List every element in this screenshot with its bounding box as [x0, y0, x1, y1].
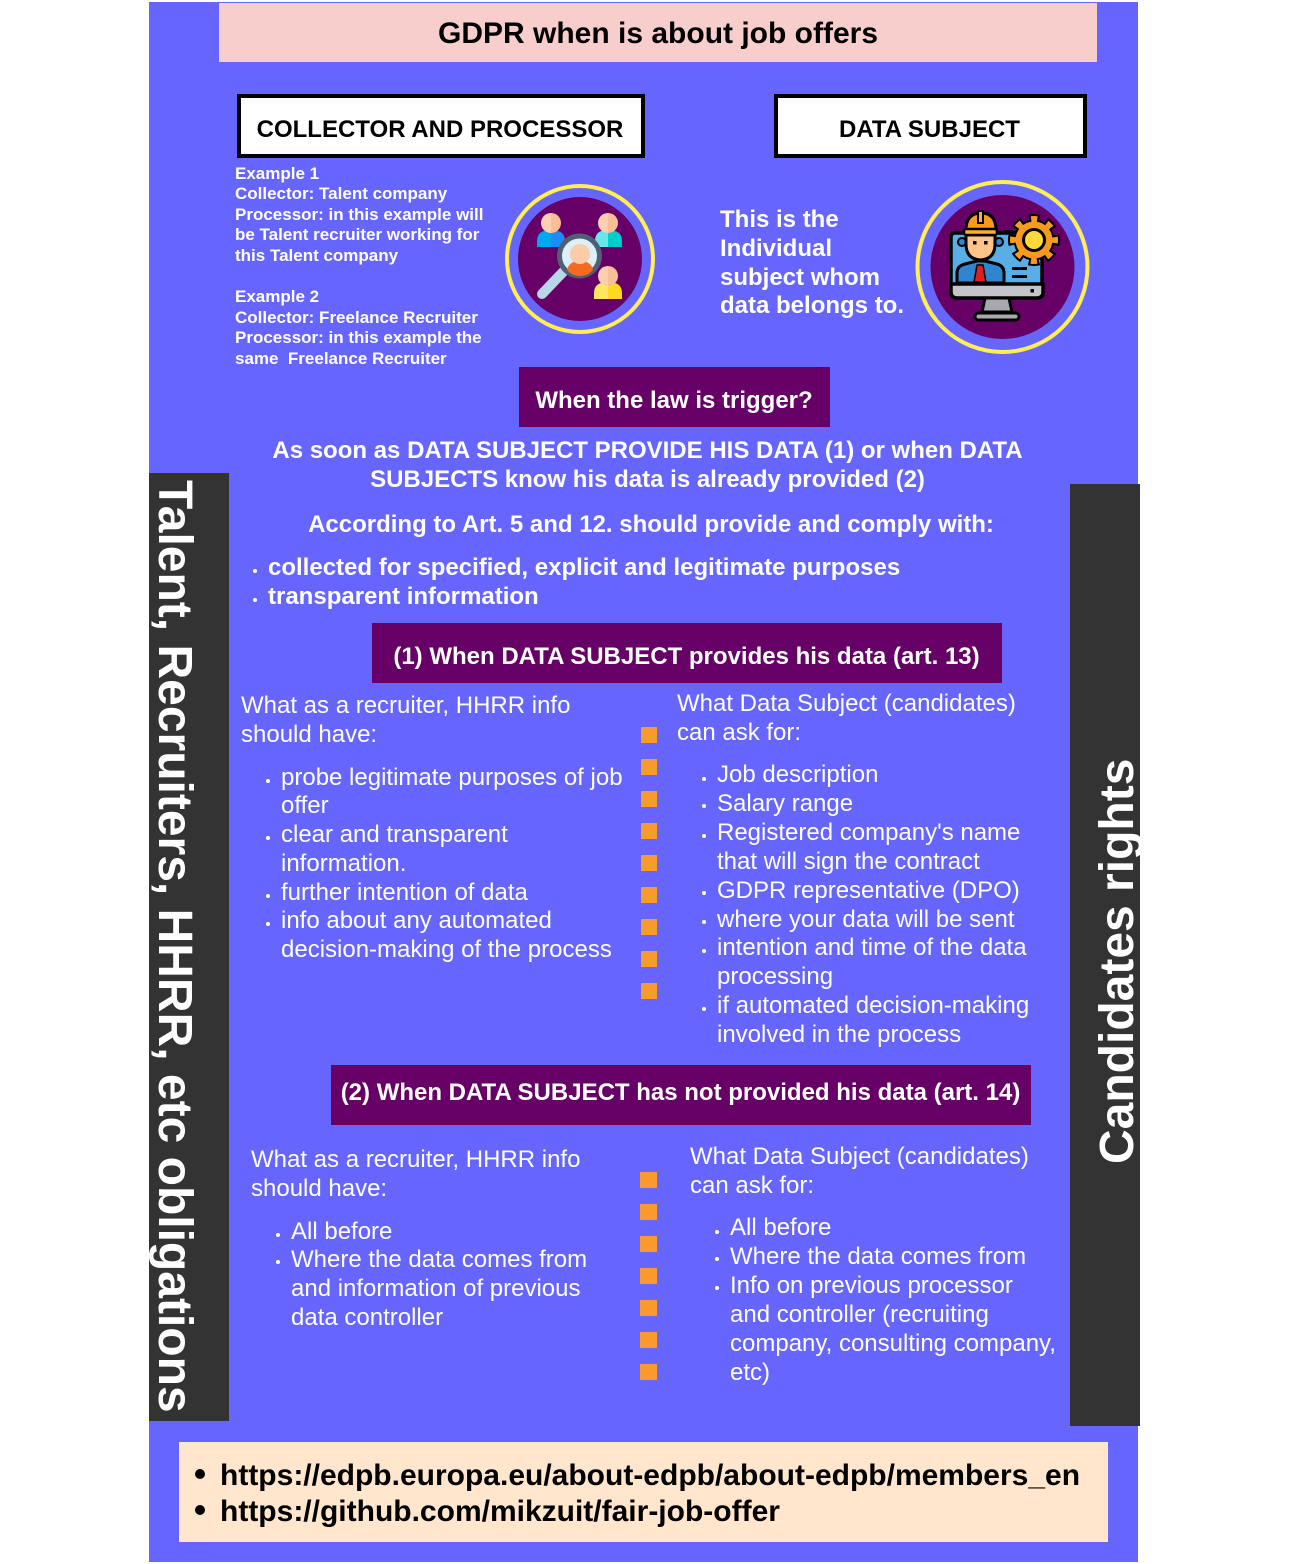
text block: recruiter info section 1: offer — [281, 792, 329, 819]
text block: candidate rights section 1: processing — [717, 963, 833, 990]
text block: candidate rights section 1: Registered company's name — [717, 819, 1020, 846]
list: principles: transparent information — [268, 583, 539, 610]
sidebar: recruiter obligations: Talent, Recruiters, HHRR, etc obligations — [148, 480, 201, 1413]
heading: when the law is trigger — [519, 367, 830, 427]
text block: recruiter info section 2: Where the data comes from — [291, 1246, 587, 1273]
text block: candidate rights section 2: All before — [730, 1214, 831, 1241]
text block: data subject definition: Individual — [720, 235, 832, 262]
title: GDPR when is about job offers — [438, 17, 878, 50]
text block: trigger explanation: As soon as DATA SUBJECT PROVIDE HIS DATA (1) or when DATA — [272, 437, 1023, 464]
heading: section 2: (2) When DATA SUBJECT has not provided his data (art. 14) — [341, 1079, 1020, 1106]
text block: candidate rights section 2: company, consulting company, — [730, 1330, 1056, 1357]
divider squares section 2 — [640, 1172, 657, 1380]
text block: recruiter info section 2: What as a recruiter, HHRR info — [251, 1146, 580, 1173]
icon: recruiter search — [505, 184, 655, 334]
text block: candidate rights section 1: where your data will be sent — [717, 906, 1014, 933]
title — [219, 3, 1097, 62]
text block: data subject definition: This is the — [720, 206, 839, 233]
text block: candidate rights section 2: and controller (recruiting — [730, 1301, 989, 1328]
text block: collector examples: this Talent company — [235, 246, 398, 265]
text block: recruiter info section 2: and information of previous — [291, 1275, 580, 1302]
text block: candidate rights section 1: Job description — [717, 761, 878, 788]
heading: collector and processor: COLLECTOR AND PROCESSOR — [257, 116, 623, 143]
text block: recruiter info section 1: decision-making of the process — [281, 936, 612, 963]
list: principles — [253, 554, 900, 610]
text block: candidate rights section 2: What Data Subject (candidates) — [690, 1143, 1029, 1170]
text block: candidate rights section 2: Where the data comes from — [730, 1243, 1026, 1270]
text block: candidate rights section 1: GDPR representative (DPO) — [717, 877, 1020, 904]
panel: reference links: https://github.com/mikzuit/fair-job-offer — [220, 1495, 780, 1528]
text block: collector examples: be Talent recruiter working for — [235, 225, 479, 244]
text block: recruiter info section 1 — [241, 692, 623, 963]
text block: collector examples: Processor: in this example the — [235, 328, 482, 347]
text block: recruiter info section 1: information. — [281, 850, 406, 877]
text block: recruiter info section 2: All before — [291, 1218, 392, 1244]
heading: section 2 — [331, 1065, 1031, 1125]
text block: trigger explanation — [272, 437, 1023, 493]
heading: data subject — [774, 94, 1087, 158]
text block: data subject definition: subject whom — [720, 264, 880, 291]
text block: candidate rights section 1: What Data Subject (candidates) — [677, 690, 1016, 717]
heading: when the law is trigger: When the law is trigger? — [535, 387, 813, 414]
icon: data subject computer — [916, 180, 1090, 354]
text block: collector examples: Example 1 — [235, 164, 319, 182]
text block: collector examples — [235, 164, 483, 368]
text block: candidate rights section 1 — [677, 690, 1029, 1048]
text block: recruiter info section 2: should have: — [251, 1175, 387, 1202]
sidebar: recruiter obligations — [149, 473, 229, 1421]
text block: candidate rights section 1: that will sign the contract — [717, 848, 980, 875]
heading: section 1 — [372, 623, 1002, 683]
text block: candidate rights section 1: involved in the process — [717, 1021, 961, 1048]
text block: candidate rights section 2 — [690, 1143, 1056, 1386]
text block: article 5 and 12: According to Art. 5 and 12. should provide and comply with: — [308, 511, 994, 538]
text block: recruiter info section 2: data controller — [291, 1304, 443, 1331]
heading: section 1: (1) When DATA SUBJECT provides his data (art. 13) — [393, 643, 980, 670]
panel: reference links: https://edpb.europa.eu/about-edpb/about-edpb/members_en — [220, 1459, 1080, 1492]
text block: candidate rights section 1: intention and time of the data — [717, 934, 1027, 961]
text block: collector examples: same Freelance Recruiter — [235, 349, 447, 368]
text block: candidate rights section 2: can ask for: — [690, 1172, 814, 1199]
text block: candidate rights section 1: if automated decision-making — [717, 992, 1029, 1019]
text block: recruiter info section 2 — [251, 1146, 587, 1331]
text block: data subject definition: data belongs to. — [720, 292, 904, 319]
sidebar: candidates rights: Candidates rights — [1091, 759, 1144, 1164]
page background panel — [149, 2, 1138, 1562]
text block: recruiter info section 1: What as a recruiter, HHRR info — [241, 692, 570, 719]
text block: collector examples: Collector: Freelance Recruiter — [235, 308, 478, 327]
heading: data subject: DATA SUBJECT — [839, 116, 1020, 143]
sidebar: candidates rights — [1070, 484, 1140, 1426]
text block: collector examples: Collector: Talent company — [235, 184, 447, 203]
text block: candidate rights section 1: Salary range — [717, 790, 853, 817]
text block: recruiter info section 1: further intention of data — [281, 879, 528, 906]
text block: candidate rights section 2: etc) — [730, 1359, 770, 1386]
text block: collector examples: Example 2 — [235, 287, 319, 306]
text block: recruiter info section 1: info about any automated — [281, 907, 552, 934]
divider squares section 1 — [641, 727, 657, 999]
text block: trigger explanation: SUBJECTS know his data is already provided (2) — [370, 466, 925, 493]
heading: collector and processor — [237, 94, 645, 158]
text block: recruiter info section 1: should have: — [241, 721, 377, 748]
text block: recruiter info section 1: clear and transparent — [281, 821, 508, 848]
text block: collector examples: Processor: in this example will — [235, 205, 483, 224]
list: principles: collected for specified, explicit and legitimate purposes — [268, 554, 900, 581]
text block: recruiter info section 1: probe legitimate purposes of job — [281, 764, 623, 790]
panel: reference links — [179, 1442, 1108, 1542]
text block: candidate rights section 1: can ask for: — [677, 719, 801, 746]
text block: data subject definition — [720, 206, 904, 319]
text block: candidate rights section 2: Info on previous processor — [730, 1272, 1013, 1299]
